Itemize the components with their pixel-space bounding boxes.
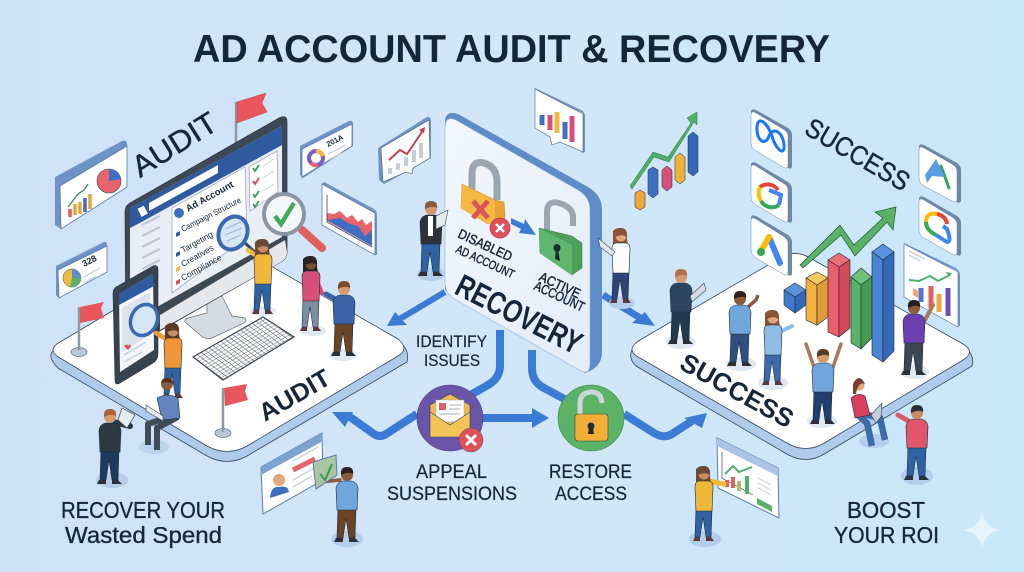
label: appeal suspensions: APPEAL bbox=[416, 462, 487, 483]
chart card: area chart bbox=[322, 182, 377, 255]
label: audit floor: AUDIT bbox=[254, 364, 336, 427]
label: restore access bbox=[549, 462, 632, 505]
icon: check magnifier bbox=[264, 194, 322, 248]
speech bubble chart: bars bbox=[535, 88, 585, 153]
chart card: donut: 201A bbox=[325, 132, 345, 149]
label: identify issues bbox=[416, 332, 487, 370]
label: boost your roi bbox=[834, 497, 939, 548]
monitor bbox=[125, 117, 287, 346]
label: identify issues: IDENTIFY bbox=[416, 332, 487, 351]
chart card: donut bbox=[300, 121, 353, 178]
person: man with approval card bbox=[320, 467, 363, 547]
person: man with tablet bbox=[417, 201, 448, 281]
icon: google cloud logo card bbox=[919, 196, 961, 256]
monitor card text: Campaign Structure bbox=[179, 195, 243, 234]
panel: success platform bbox=[631, 254, 973, 460]
icon: monitor magnifier bbox=[213, 212, 258, 255]
icon: blue ads logo card bbox=[919, 144, 961, 203]
label: active account: ACTIVE bbox=[537, 269, 583, 301]
icon: phone magnifier bbox=[125, 300, 163, 340]
icon: flag front bbox=[215, 384, 248, 438]
monitor card text: Creatives bbox=[179, 243, 215, 269]
person: woman looking at phone bbox=[758, 310, 792, 390]
label: active account: ACCOUNT bbox=[532, 278, 587, 315]
label: appeal suspensions: SUSPENSIONS bbox=[387, 484, 517, 505]
panel: recovery card bbox=[445, 113, 602, 373]
icon: top red flag bbox=[236, 93, 267, 145]
label: boost your roi: BOOST bbox=[847, 497, 925, 523]
monitor card text: Compliance bbox=[179, 252, 223, 283]
icon: appeal envelope circle bbox=[417, 385, 483, 452]
chart card: pie 328 bbox=[56, 242, 107, 298]
person: seated woman with laptop bbox=[851, 378, 889, 448]
icon: meta logo card bbox=[751, 109, 792, 169]
label: identify issues: ISSUES bbox=[424, 351, 480, 370]
label: recover your wasted spend bbox=[61, 497, 225, 548]
label: appeal suspensions bbox=[387, 462, 517, 505]
person: man looking at phone bbox=[726, 291, 758, 371]
label: audit floating: AUDIT bbox=[126, 106, 223, 184]
floating growth chart bbox=[630, 112, 698, 210]
person: man in red bbox=[898, 405, 933, 485]
icon: ads logo card bbox=[751, 215, 792, 276]
title: AD ACCOUNT AUDIT & RECOVERY bbox=[193, 28, 830, 71]
person: woman at monitor bbox=[248, 239, 276, 316]
approval window bbox=[261, 433, 337, 514]
icon: google logo card bbox=[751, 162, 792, 223]
label: success floor: SUCCESS bbox=[675, 347, 799, 434]
icon: sparkle watermark bbox=[964, 512, 1000, 548]
person: woman at phone bbox=[156, 323, 183, 398]
monitor card text: Targeting bbox=[179, 229, 215, 255]
label: boost your roi: YOUR ROI bbox=[834, 522, 939, 548]
label: recover your wasted spend: Wasted Spend bbox=[65, 522, 222, 548]
label: recovery: RECOVERY bbox=[450, 267, 588, 361]
label: recover your wasted spend: RECOVER YOUR bbox=[61, 497, 225, 523]
panel: audit platform bbox=[51, 246, 408, 462]
speech bubble chart: rising line bbox=[378, 117, 431, 184]
person: woman in pink bbox=[300, 256, 326, 336]
icon: active lock bbox=[539, 202, 582, 275]
label: disabled ad account bbox=[454, 226, 517, 282]
success bar chart bbox=[784, 244, 894, 362]
person: seated man with laptop bbox=[139, 378, 180, 454]
monitor card text: Ad Account bbox=[184, 179, 236, 215]
person: woman at window chart bbox=[689, 466, 724, 547]
recovery arrows bbox=[350, 292, 692, 436]
success arrow bbox=[800, 207, 896, 268]
person: man in blue with brown trousers bbox=[326, 281, 357, 361]
icon: restore lock circle bbox=[558, 385, 624, 451]
keyboard bbox=[193, 317, 294, 380]
label: disabled ad account: DISABLED bbox=[456, 226, 515, 264]
label: active account bbox=[532, 269, 587, 315]
icon: disabled lock bbox=[461, 162, 510, 238]
icon: flag left bbox=[71, 302, 104, 356]
label: restore access: RESTORE bbox=[549, 462, 632, 483]
person: standing man with laptop bbox=[96, 408, 135, 488]
label: restore access: ACCESS bbox=[555, 484, 627, 505]
chart card: success report bbox=[904, 243, 960, 327]
icon: small arrow between locks bbox=[511, 218, 536, 235]
person: man with laptop on success platform bbox=[666, 269, 706, 349]
window chart bbox=[717, 438, 779, 518]
chart card: pie 328: 328 bbox=[80, 253, 98, 269]
label: disabled ad account: AD ACCOUNT bbox=[454, 242, 517, 282]
person: woman with laptop bbox=[598, 228, 635, 309]
arrowheads bbox=[332, 312, 707, 428]
monitor card text bbox=[179, 179, 243, 283]
person: cheering man bbox=[806, 344, 841, 428]
chart card: bars and pie bbox=[55, 140, 127, 229]
label: success floating: SUCCESS bbox=[800, 112, 915, 197]
person: man in purple at chart bbox=[901, 300, 933, 379]
monitor stand bbox=[185, 296, 246, 339]
phone bbox=[113, 266, 158, 384]
